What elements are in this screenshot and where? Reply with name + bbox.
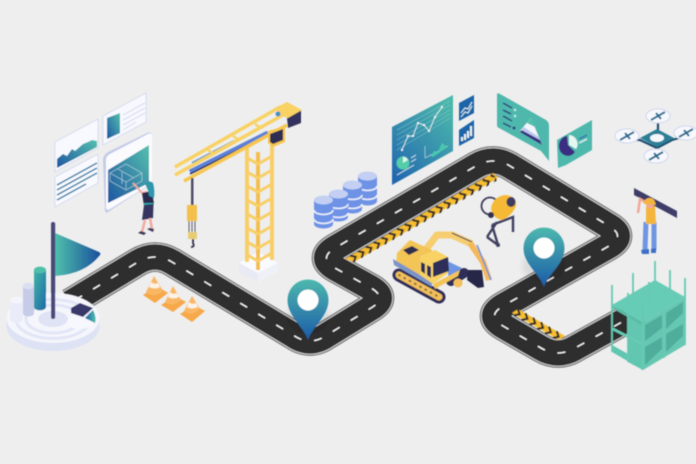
drone bbox=[615, 109, 696, 163]
panel: area chart bbox=[55, 119, 98, 172]
scene bbox=[6, 93, 696, 370]
bar: teal bbox=[34, 267, 46, 310]
figure: woman at tablet bbox=[133, 181, 154, 235]
top slab bbox=[612, 280, 685, 323]
stack 4 bbox=[358, 172, 377, 206]
speech card: pie bbox=[557, 120, 592, 168]
tower crane bbox=[175, 102, 302, 282]
rotor 2 bbox=[615, 129, 639, 143]
stack 1 bbox=[314, 196, 333, 228]
flag pole bbox=[51, 222, 55, 319]
line chart bbox=[402, 107, 442, 150]
legs bbox=[645, 222, 654, 250]
bar: light bbox=[10, 296, 23, 322]
cab bbox=[420, 250, 460, 289]
arm bbox=[424, 233, 491, 280]
jib top cap bbox=[275, 102, 302, 118]
counterweight bbox=[287, 110, 301, 128]
panel: document bbox=[103, 93, 146, 145]
worker carrying beam bbox=[634, 188, 677, 254]
torso bbox=[646, 205, 656, 224]
far track bbox=[451, 273, 464, 288]
pyramid bbox=[520, 118, 542, 145]
database stacks bbox=[314, 172, 377, 228]
hazard stripe: upper bbox=[345, 173, 498, 262]
hair bbox=[145, 181, 154, 198]
left wall solid part bbox=[628, 314, 643, 370]
cone 2 bbox=[161, 286, 186, 312]
hook bbox=[187, 178, 197, 247]
map pin 2 bbox=[522, 228, 566, 287]
cone 3 bbox=[180, 296, 205, 322]
crane base bbox=[239, 252, 278, 282]
rotor 1 bbox=[646, 109, 670, 123]
posts bbox=[612, 261, 685, 370]
jib bbox=[175, 107, 287, 181]
stack 3 bbox=[343, 180, 362, 214]
bottom slab bbox=[612, 345, 643, 370]
donut bbox=[396, 156, 410, 170]
skirt bbox=[142, 204, 154, 220]
mini pie bbox=[67, 303, 96, 329]
green building frame bbox=[612, 261, 685, 370]
head with hard hat bbox=[644, 198, 656, 208]
drone body bbox=[640, 129, 674, 147]
boots bbox=[641, 248, 656, 254]
target with flag and bars bbox=[6, 222, 100, 351]
dashboard panel bbox=[392, 95, 453, 185]
bucket bbox=[467, 270, 484, 288]
mini area chart bbox=[425, 143, 448, 158]
hazard stripe: lower bbox=[512, 309, 565, 340]
cells bbox=[645, 302, 683, 365]
drone arms bbox=[627, 116, 686, 156]
wheel bbox=[482, 198, 498, 214]
blue panel bbox=[445, 260, 462, 278]
legs bbox=[142, 218, 152, 232]
cab bbox=[268, 126, 285, 147]
legs bbox=[487, 217, 513, 245]
stack 2 bbox=[329, 190, 348, 222]
cement mixer bbox=[482, 195, 516, 247]
panel: text lines bbox=[55, 154, 98, 207]
traffic cones bbox=[143, 276, 205, 322]
body bbox=[393, 240, 436, 287]
road bbox=[70, 161, 640, 353]
arm bbox=[638, 199, 650, 213]
wheels bbox=[496, 243, 500, 247]
bar: lavender bbox=[23, 283, 34, 316]
rotor 4 bbox=[644, 149, 668, 163]
mast bbox=[247, 145, 272, 270]
cone 1 bbox=[143, 276, 168, 303]
torso bbox=[142, 191, 154, 206]
right face bbox=[643, 297, 685, 370]
tablet with blueprint bbox=[103, 132, 152, 213]
beam bbox=[634, 188, 677, 218]
map pin 1 bbox=[286, 280, 330, 340]
rotor 3 bbox=[674, 126, 696, 140]
excavator bbox=[393, 233, 491, 297]
near track bbox=[399, 275, 439, 297]
mini card: line chart bbox=[459, 95, 474, 121]
mini card: bar chart bbox=[459, 120, 474, 146]
shoes bbox=[138, 228, 154, 235]
middle slab bbox=[612, 327, 643, 346]
speech card: pyramid bbox=[497, 93, 549, 161]
drum bbox=[488, 195, 516, 220]
flag bbox=[55, 233, 100, 276]
